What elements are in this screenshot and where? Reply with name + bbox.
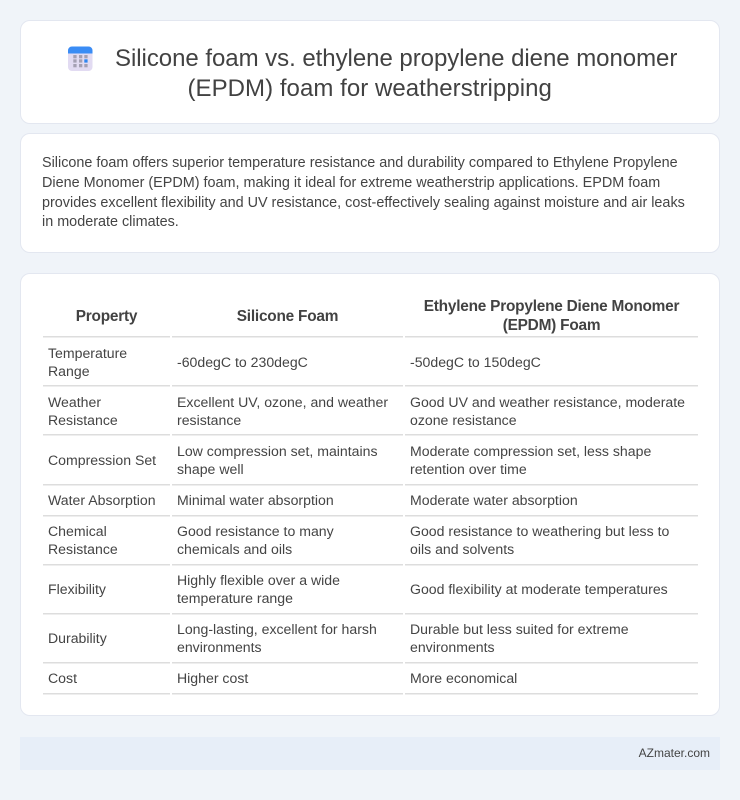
title	[115, 45, 677, 102]
comparison table: Highly flexible over a wide	[177, 572, 340, 588]
comparison table: environments	[410, 639, 495, 655]
comparison table: (EPDM) Foam	[503, 316, 600, 334]
header card	[20, 20, 720, 124]
comparison table: Low compression set, maintains	[177, 442, 378, 458]
intro text	[42, 155, 685, 230]
comparison table: Good resistance to weathering but less to	[410, 523, 669, 539]
comparison table: Durability	[48, 630, 107, 646]
comparison table: retention over time	[410, 460, 527, 476]
intro text: Diene Monomer (EPDM) foam, making it ideal for extreme weatherstrip applications. EPDM foam	[42, 175, 660, 191]
intro text: in moderate climates.	[42, 214, 179, 230]
title: (EPDM) foam for weatherstripping	[188, 75, 552, 102]
comparison table: Cost	[48, 670, 77, 686]
comparison table: Silicone Foam	[237, 308, 338, 325]
comparison table: oils and solvents	[410, 541, 514, 557]
comparison table: Good resistance to many	[177, 523, 334, 539]
comparison table: temperature range	[177, 590, 293, 606]
comparison table: Moderate water absorption	[410, 492, 578, 508]
comparison table: Range	[48, 363, 90, 379]
comparison table: Weather	[48, 394, 101, 410]
comparison table: Compression Set	[48, 452, 156, 468]
comparison table: Minimal water absorption	[177, 492, 334, 508]
comparison table: shape well	[177, 460, 244, 476]
comparison table: More economical	[410, 670, 517, 686]
comparison table: environments	[177, 639, 262, 655]
comparison table: Ethylene Propylene Diene Monomer	[424, 298, 679, 314]
comparison table: Higher cost	[177, 670, 248, 686]
comparison table: Good flexibility at moderate temperatures	[410, 581, 668, 597]
comparison table: ozone resistance	[410, 412, 517, 428]
comparison table: Moderate compression set, less shape	[410, 442, 651, 458]
comparison table: Long-lasting, excellent for harsh	[177, 621, 377, 637]
comparison table: Water Absorption	[48, 492, 156, 508]
comparison table: Good UV and weather resistance, moderate	[410, 394, 685, 410]
title: Silicone foam vs. ethylene propylene diene monomer	[115, 45, 677, 72]
comparison table: chemicals and oils	[177, 541, 292, 557]
comparison table: Flexibility	[48, 581, 106, 597]
comparison table: Temperature	[48, 345, 127, 361]
comparison table: Durable but less suited for extreme	[410, 621, 629, 637]
comparison table: Property	[76, 308, 137, 325]
source credit: AZmater.com	[639, 746, 710, 760]
comparison table: resistance	[177, 412, 241, 428]
comparison table: Chemical	[48, 523, 107, 539]
comparison table	[43, 298, 698, 695]
intro text: Silicone foam offers superior temperature resistance and durability compared to Ethylene Propylene	[42, 155, 678, 171]
footer bar	[20, 737, 720, 770]
comparison table: Resistance	[48, 541, 118, 557]
comparison table: -50degC to 150degC	[410, 354, 541, 370]
comparison table card	[20, 273, 720, 716]
icon: calendar	[68, 46, 92, 71]
comparison table: Excellent UV, ozone, and weather	[177, 394, 388, 410]
intro paragraph card	[20, 133, 720, 253]
comparison table: Resistance	[48, 412, 118, 428]
intro text: provides excellent flexibility and UV resistance, cost-effectively sealing against moisture and air leaks	[42, 195, 685, 211]
comparison table: -60degC to 230degC	[177, 354, 308, 370]
